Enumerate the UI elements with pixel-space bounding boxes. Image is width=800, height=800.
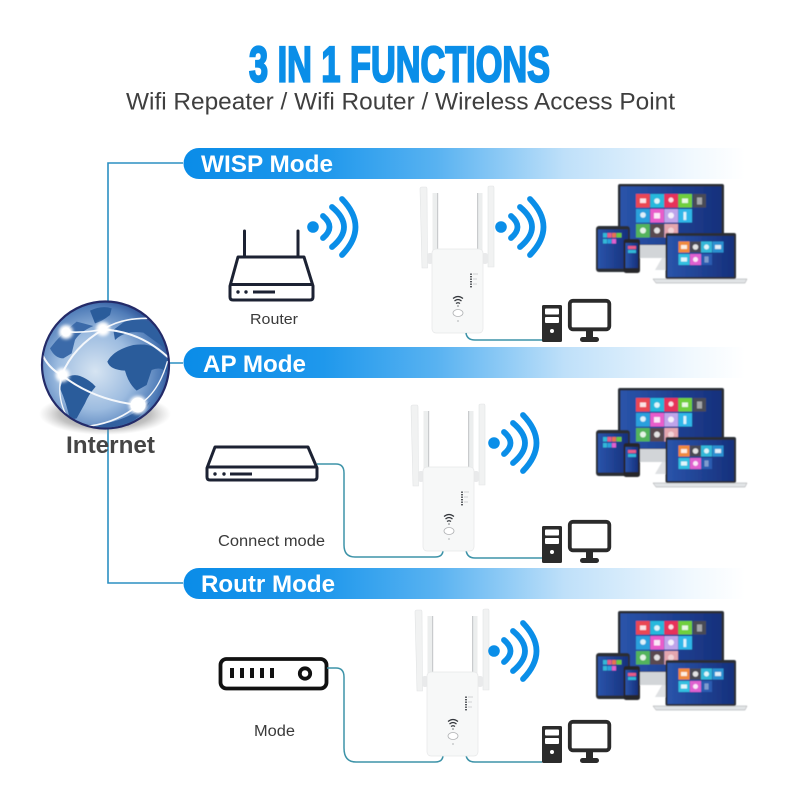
cable: modem to repeater (327, 668, 542, 762)
panel: WISP Mode banner: WISP Mode (201, 151, 333, 178)
icon: repeater AP (411, 404, 485, 551)
icon: desktop PC Routr (542, 722, 609, 763)
icon: desktop PC AP (542, 522, 609, 563)
icon: desktop PC WISP (542, 301, 609, 342)
icon: devices AP (596, 388, 747, 487)
icon: modem (220, 659, 326, 688)
subtitle: Wifi Repeater / Wifi Router / Wireless Access Point (126, 88, 675, 116)
icon: devices WISP (596, 184, 747, 283)
icon: internet globe (39, 302, 171, 435)
title: 3 IN 1 FUNCTIONS (249, 36, 550, 92)
panel: Routr Mode banner: Routr Mode (201, 571, 335, 598)
label: Router: Router (250, 311, 298, 328)
icon: devices Routr (596, 611, 747, 710)
icon: wifi signal repeater Routr (488, 623, 536, 679)
panel: AP Mode banner (183, 347, 745, 378)
cable: repeater to PC WISP (466, 333, 542, 340)
icon: repeater WISP (420, 186, 494, 333)
panel: AP Mode banner: AP Mode (203, 351, 306, 378)
label: Mode: Mode (254, 723, 295, 740)
label: Connect mode: Connect mode (218, 533, 325, 550)
label: Internet: Internet (66, 432, 155, 459)
cable: connect device to repeater (317, 464, 542, 558)
icon: connect mode device (207, 447, 317, 480)
connector lines: internet to modes (108, 163, 183, 583)
icon: router with antennas (230, 231, 313, 300)
panel: Routr Mode banner (183, 568, 745, 599)
icon: wifi signal repeater AP (488, 415, 536, 471)
icon: wifi signal router (307, 199, 356, 255)
panel: WISP Mode banner (183, 148, 745, 179)
icon: repeater Routr (415, 609, 489, 756)
icon: wifi signal repeater WISP (495, 199, 544, 255)
